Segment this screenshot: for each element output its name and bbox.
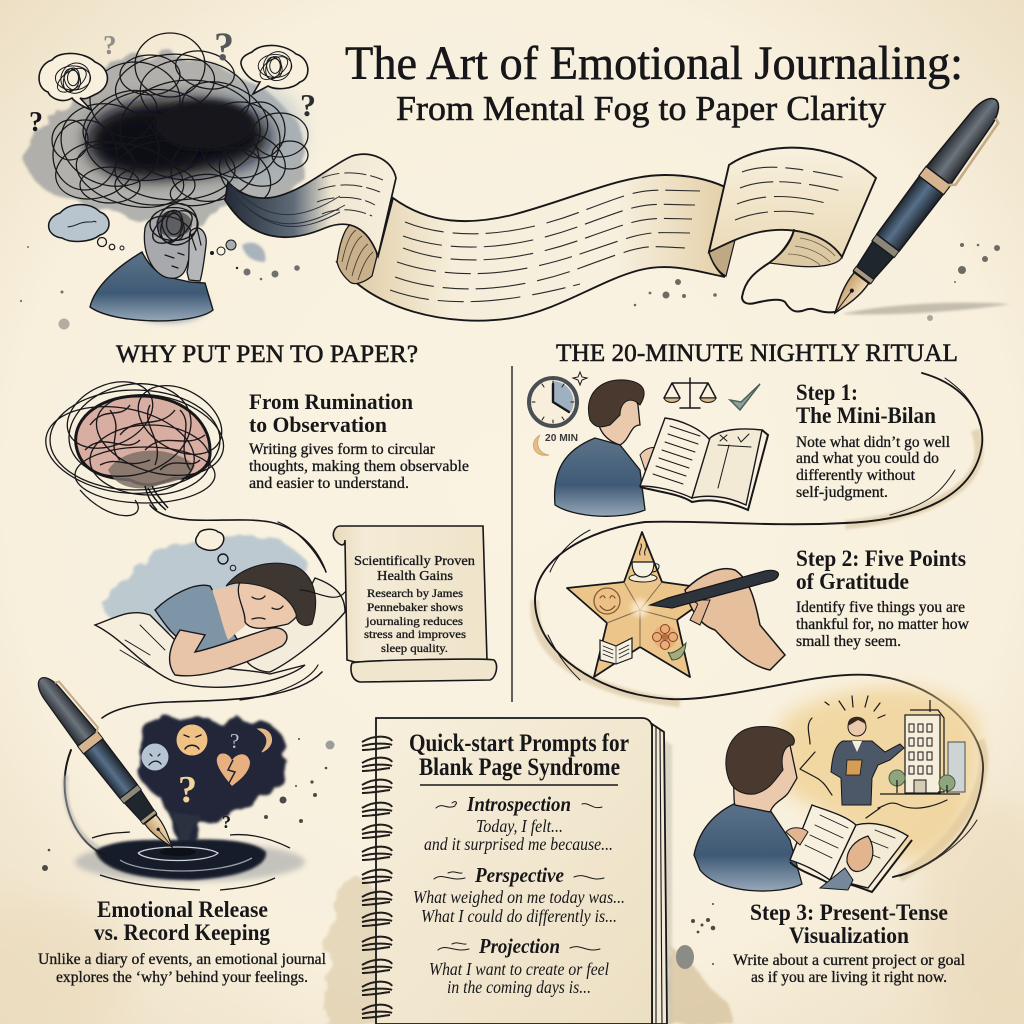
reader xyxy=(694,726,802,891)
prompt: projection: What I want to create or feel xyxy=(429,959,609,979)
ink line from ribbon to nib xyxy=(742,230,835,312)
neck xyxy=(212,585,246,640)
prompt: projection: Projection xyxy=(478,934,560,958)
illustration: step 3 present-tense visualization xyxy=(694,687,979,892)
blanket xyxy=(95,613,305,687)
text block: from rumination to observation: Writing gives form to circular xyxy=(249,441,436,458)
text block: step 2 five points of gratitude: Identify five things you are xyxy=(796,599,965,616)
pillow xyxy=(244,578,345,672)
paper stains xyxy=(0,800,1024,1024)
building xyxy=(905,700,965,793)
text block: step 1 the mini-bilan xyxy=(796,380,950,501)
panel: spiral notebook of prompts xyxy=(362,718,672,1024)
trees and ground xyxy=(880,770,960,794)
icon: check mark xyxy=(730,384,760,410)
text block: step 2 five points of gratitude: thankful for, no matter how xyxy=(796,616,970,633)
ribbon: main band xyxy=(337,175,725,321)
center column divider xyxy=(511,366,513,702)
face xyxy=(238,573,304,628)
ink splatter: lower right xyxy=(676,903,715,969)
text block: step 3 present-tense visualization: Visualization xyxy=(789,923,909,948)
text block: step 1 the mini-bilan: The Mini-Bilan xyxy=(796,403,936,428)
text block: step 1 the mini-bilan: differently without xyxy=(796,467,916,484)
gratitude star xyxy=(567,532,719,677)
question marks xyxy=(29,24,316,138)
prompt: perspective xyxy=(413,863,625,926)
flowing line from brain to sleeper xyxy=(150,505,326,572)
text block: step 3 present-tense visualization xyxy=(733,900,965,986)
text block: from rumination to observation: From Rumination xyxy=(249,389,413,414)
scroll: scientifically proven health gains: sleep quality. xyxy=(381,641,448,655)
text block: step 1 the mini-bilan: self-judgment. xyxy=(796,484,888,501)
text block: step 2 five points of gratitude: small they seem. xyxy=(796,633,901,650)
text block: step 2 five points of gratitude: of Gratitude xyxy=(796,569,909,594)
icon: flower xyxy=(652,624,686,660)
illustration: stressed man holding head xyxy=(90,196,236,323)
ribbon: under fold xyxy=(337,223,377,284)
arm xyxy=(170,628,287,676)
text block: emotional release vs record keeping: vs. Record Keeping xyxy=(94,920,270,945)
prompt: projection xyxy=(429,934,609,997)
title: From Mental Fog to Paper Clarity xyxy=(396,89,887,128)
prompt: perspective: What I could do differently is... xyxy=(421,906,617,926)
prompt: perspective: Perspective xyxy=(474,863,564,887)
scroll: scientifically proven health gains: stress and improves xyxy=(364,627,466,641)
emotion: sad orange face xyxy=(176,724,208,756)
thought bubble: left xyxy=(39,53,107,110)
text block: step 1 the mini-bilan: Note what didn’t go well xyxy=(796,434,950,451)
icon: balance scales xyxy=(664,378,716,408)
emotion: sad blue bubble xyxy=(142,744,168,770)
question marks: ? xyxy=(214,24,234,69)
thought cloud above sleeper xyxy=(196,529,236,571)
flowing s-curve connector for ritual steps xyxy=(535,373,983,878)
text block: from rumination to observation: and easier to understand. xyxy=(249,475,409,492)
ribbon: under-curl near end xyxy=(769,230,842,267)
reader xyxy=(555,380,658,516)
scroll: scientifically proven health gains xyxy=(333,526,497,682)
illustration: ink smoke with emotions: ? xyxy=(230,729,239,753)
prompt: introspection xyxy=(424,792,613,854)
text block: emotional release vs record keeping: Emotional Release xyxy=(97,897,268,922)
scroll: scientifically proven health gains: Health Gains xyxy=(377,568,453,583)
prompt: perspective: What weighed on me today was... xyxy=(413,887,625,907)
prompt: introspection: Introspection xyxy=(466,792,571,816)
question marks: ? xyxy=(300,87,316,123)
title: The Art of Emotional Journaling: xyxy=(345,37,963,90)
text block: step 1 the mini-bilan: Step 1: xyxy=(796,380,858,405)
visualized figure xyxy=(831,717,904,805)
notebook heading xyxy=(409,730,629,785)
scroll: scientifically proven health gains: Pennebaker shows xyxy=(367,600,463,614)
text block: step 2 five points of gratitude: Step 2: Five Points xyxy=(796,546,966,571)
ink tail arc xyxy=(65,750,105,855)
illustration: pen in ink xyxy=(31,669,184,855)
text block: emotional release vs record keeping xyxy=(38,897,326,986)
scroll: scientifically proven health gains: journaling reduces xyxy=(365,614,463,628)
icon: open book xyxy=(600,638,632,664)
notebook page xyxy=(376,718,652,1024)
thought bubble: right xyxy=(241,45,308,94)
prompt: introspection: Today, I felt... xyxy=(476,816,563,836)
illustration: fountain pen writing xyxy=(823,90,1011,324)
illustration: unfurling paper ribbon xyxy=(225,148,876,321)
spiral binding xyxy=(362,737,392,1018)
question marks: ? xyxy=(29,107,43,138)
text block: from rumination to observation: to Observation xyxy=(249,412,387,437)
handwriting lines: main band xyxy=(390,190,700,302)
ink splatter: around pen xyxy=(634,243,1000,321)
text block: step 3 present-tense visualization: as if you are living it right now. xyxy=(751,969,947,986)
text block: from rumination to observation: thoughts, making them observable xyxy=(249,458,469,475)
ink splatter: near man xyxy=(20,243,300,330)
ribbon: curled end panel xyxy=(709,148,876,257)
text block: step 3 present-tense visualization: Step 3: Present-Tense xyxy=(750,900,948,925)
open journal xyxy=(786,805,912,892)
shirt xyxy=(155,585,245,665)
scroll: scientifically proven health gains: Research by James xyxy=(367,586,463,600)
thought bubble: calm lower cloud xyxy=(49,205,124,250)
hair xyxy=(226,563,316,626)
title xyxy=(345,37,963,128)
text block: emotional release vs record keeping: Unlike a diary of events, an emotional journal xyxy=(38,951,326,968)
notebook heading: Quick-start Prompts for xyxy=(409,730,629,757)
notebook heading: Blank Page Syndrome xyxy=(419,754,620,781)
icon: crescent moon and duration: 20 MIN xyxy=(545,433,578,444)
text block: step 1 the mini-bilan: and what you could do xyxy=(796,450,939,467)
icon: clock xyxy=(529,378,577,426)
scribble tangle xyxy=(49,33,308,218)
icon: smiling face xyxy=(594,588,620,614)
question marks: ? xyxy=(103,30,116,60)
illustration: ink smoke with emotions: ? xyxy=(222,812,231,832)
illustration: tangled brain xyxy=(39,369,234,516)
scribble lines around brain xyxy=(39,369,234,516)
text block: step 2 five points of gratitude xyxy=(796,546,970,650)
light rays xyxy=(825,696,885,718)
text block: step 3 present-tense visualization: Write about a current project or goal xyxy=(733,952,965,969)
text block: from rumination to observation xyxy=(249,389,469,492)
section heading: the 20-minute nightly ritual: THE 20-MINUTE NIGHTLY RITUAL xyxy=(556,340,958,367)
prompt: projection: in the coming days is... xyxy=(447,977,591,997)
illustration: sleeping woman xyxy=(95,522,345,700)
illustration: step 2 gratitude star and writing hand xyxy=(567,532,785,677)
ink splatter: beside swirl xyxy=(42,738,334,871)
golden wash xyxy=(780,687,979,860)
illustration: ink pool swirl xyxy=(65,750,305,890)
illustration: ink smoke with emotions xyxy=(136,716,288,850)
icon: crescent moon and duration xyxy=(533,433,578,455)
open book with x and check columns xyxy=(640,418,768,510)
flowing line below sleeper xyxy=(102,672,322,718)
emotion: broken heart xyxy=(217,753,250,786)
illustration: ink smoke with emotions: ? xyxy=(178,769,197,811)
illustration: ink cloud of tangled thoughts xyxy=(25,33,308,226)
prompt: introspection: and it surprised me because... xyxy=(424,834,613,854)
pen in hand xyxy=(650,570,778,608)
thought outline xyxy=(800,718,947,818)
text block: emotional release vs record keeping: explores the ‘why’ behind your feelings. xyxy=(56,969,308,986)
writing hand xyxy=(685,569,785,670)
section heading: why put pen to paper: WHY PUT PEN TO PAPER? xyxy=(116,341,418,368)
illustration: step 1 clock, reader and book xyxy=(529,372,768,516)
scroll: scientifically proven health gains: Scientifically Proven xyxy=(354,553,475,568)
sleeper motion lines xyxy=(240,522,345,700)
ribbon: back tail from the cloud xyxy=(225,154,396,256)
icon: coffee cup xyxy=(629,544,659,582)
